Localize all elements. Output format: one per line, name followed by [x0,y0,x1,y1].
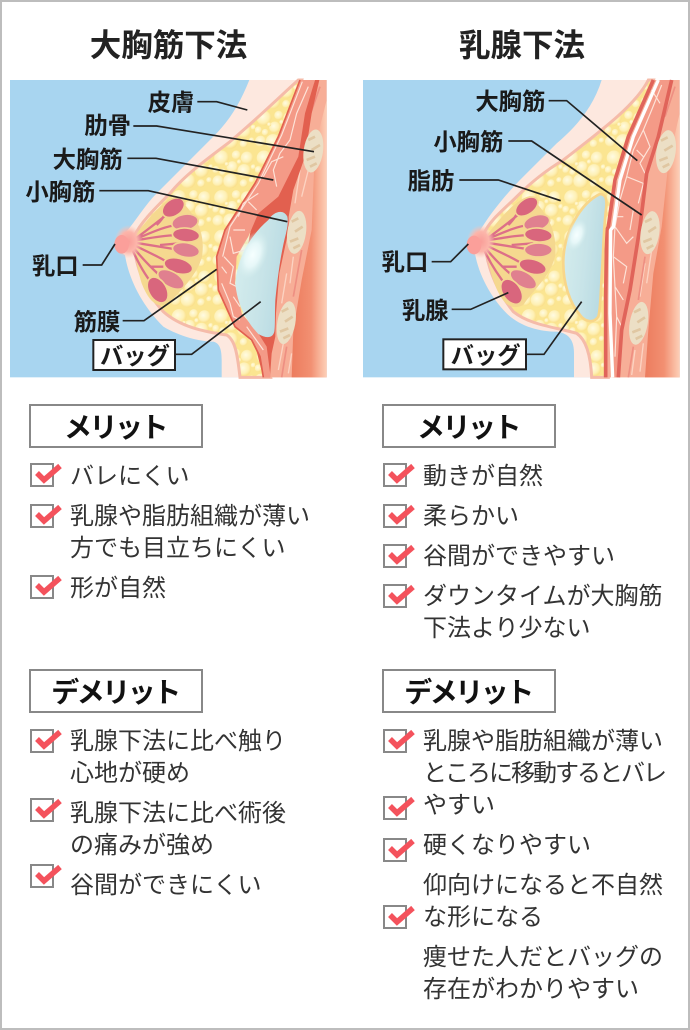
item: ダウンタイム: 下法より少ない [423,615,591,642]
heading: メリット: メリット [417,412,519,443]
heading: メリット [383,405,555,447]
background [363,80,680,377]
outer fascia [217,80,300,377]
bag highlight [231,227,274,283]
areola glow [467,225,495,258]
label: 乳口: 乳口 [382,249,428,275]
heading: メリット [30,405,202,447]
tissue behind [606,80,680,377]
label: 皮膚 [148,90,247,116]
label: 皮膚: 皮膚 [148,90,194,116]
item: やすい: やすい [423,792,495,819]
panel: 乳腺下法 メリット [383,405,663,642]
chest wall [292,100,327,377]
item: 痛み: の痛みが強め [70,832,214,859]
label: 大胸筋 [53,146,273,180]
title: 乳腺下法: 乳腺下法 [459,27,585,63]
rib 2 [638,210,662,255]
item: 触り心地 [31,728,286,787]
label: 小胸筋 [25,179,287,222]
areola glow [114,225,142,258]
implant bag [235,212,288,337]
bag highlight [562,216,591,254]
chest wall [645,113,680,377]
panel: 大胸筋下法 デメリット [30,670,286,899]
label: 肋骨: 肋骨 [84,112,131,138]
label: 乳口 [382,244,468,275]
ducts [483,212,533,288]
fat [484,80,653,377]
tissue dark streaks [628,87,675,377]
ducts [132,212,180,287]
label: 大胸筋: 大胸筋 [475,89,545,115]
background [10,80,327,377]
item: 動きが自然: 動きが自然 [423,463,543,490]
ribs [274,128,326,346]
lobules [143,194,201,307]
tissue streaks [278,170,308,373]
diagram: 乳腺下法 [363,80,680,377]
nipple [114,225,142,258]
item: 乳腺や脂肪組織が薄い: 方でも目立ちにくい [70,535,286,562]
gland background [487,196,555,307]
item: 柔らかい: 柔らかい [423,503,519,530]
rib 3 [626,300,651,346]
item: 形が自然: 形が自然 [70,575,166,602]
nipple tip [467,236,481,254]
red band [240,80,319,377]
nipple [467,225,495,258]
item: 移動 [384,728,667,787]
item: 移動: 乳腺や脂肪組織が薄い [423,728,663,755]
label: 脂肪: 脂肪 [408,168,454,194]
label: バッグ [443,302,582,369]
label: 小胸筋 [433,129,642,215]
muscle marbling [222,82,308,350]
item: 痛み: 乳腺下法に比べ術後 [70,800,286,827]
skin [467,80,680,377]
rib 1 [653,129,679,174]
diagram: 大胸筋下法 [10,80,327,377]
label: 小胸筋: 小胸筋 [25,179,95,205]
panel: 乳腺下法 デメリット [383,670,667,1003]
fascia white line [610,80,658,377]
item: やすい [384,792,495,819]
label: 乳口: 乳口 [32,253,79,279]
panel: 大胸筋下法 メリット [30,405,310,602]
rib 3 [274,300,299,346]
gland background [135,196,203,305]
title: 大胸筋下法: 大胸筋下法 [90,27,247,63]
heading: デメリット [383,670,555,712]
fascia red line [606,80,653,377]
nipple tip [114,235,129,254]
heading: メリット: メリット [64,412,166,443]
item: 触り心地: 心地が硬め [70,760,190,787]
item: 硬くなりやすい: 硬くなりやすい [423,832,591,859]
lobules [496,193,553,308]
item: ダウンタイム [384,583,663,642]
muscle marbling [613,85,662,357]
label: 乳口 [32,244,115,279]
inner red band [618,80,672,377]
tissue behind [260,80,327,377]
implant bag [563,194,606,321]
item: 谷間 [31,865,262,899]
heading: デメリット: デメリット [404,676,532,708]
label: 筋膜: 筋膜 [74,309,120,335]
label: 筋膜 [74,269,217,335]
item: 谷間: 谷間ができにくい [70,872,262,899]
item: 痩せた人: 痩せた人だとバッグの [423,944,663,971]
item: 触り心地: 乳腺下法に比べ触り [70,728,286,755]
ribs [626,129,679,346]
label: バッグ: バッグ [451,341,521,368]
item: ダウンタイム: ダウンタイムが大胸筋 [423,583,663,610]
label: 乳腺: 乳腺 [402,297,449,323]
pectoralis major [217,80,315,377]
item: 乳腺や脂肪組織が薄い [31,503,310,562]
label: 小胸筋: 小胸筋 [433,129,503,155]
tissue streaks [632,250,652,375]
label: 乳腺 [402,293,508,323]
label: 大胸筋: 大胸筋 [53,146,123,172]
heading: デメリット: デメリット [51,676,179,708]
label: 脂肪 [408,168,561,201]
pectoralis major [610,80,670,377]
item: 谷間ができやすい: 谷間ができやすい [423,543,615,570]
item: 仰向け: な形になる [423,904,543,931]
item: 痩せた人 [423,944,663,1003]
label: 肋骨 [84,112,314,152]
item: 痩せた人: 存在がわかりやすい [423,976,639,1003]
item: 仰向け: 仰向けになると不自然 [423,872,663,899]
label: 大胸筋 [475,89,637,161]
item: バレにくい: バレにくい [70,463,190,490]
mammary gland [132,194,203,307]
tissue dark streaks [282,87,320,377]
mammary gland [483,193,555,308]
item: 痛み [31,799,286,859]
item: 仰向け [384,872,663,931]
item: 乳腺や脂肪組織が薄い: 乳腺や脂肪組織が薄い [70,503,310,530]
rib 1 [301,128,326,174]
skin [115,80,327,377]
item: 移動: ところに移動するとバレ [423,760,667,787]
heading: デメリット [30,670,202,712]
rib 2 [284,210,309,255]
label: バッグ [93,302,261,370]
fat [134,80,302,377]
label: バッグ: バッグ [100,342,170,369]
